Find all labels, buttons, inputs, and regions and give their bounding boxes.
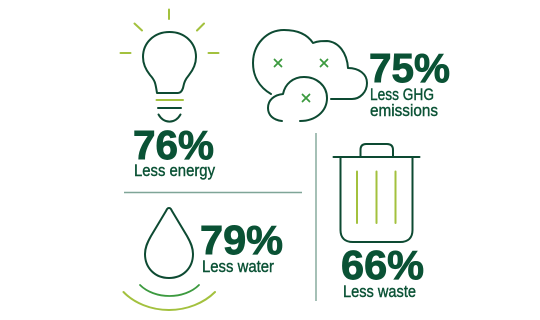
stat: 79%: 79% <box>200 217 283 263</box>
stat: 75%: 75% <box>369 45 450 91</box>
label: less GHG emissions: Less GHG <box>370 86 434 104</box>
panel: GHG emissions <box>253 30 450 121</box>
icon: clouds <box>253 30 367 121</box>
label: less GHG emissions: emissions <box>370 102 438 120</box>
label: less water: Less water <box>202 258 274 276</box>
icon: water drop <box>124 208 215 310</box>
stat: 66%: 66% <box>341 242 424 288</box>
icon: trash can <box>334 144 420 242</box>
icon: light bulb <box>120 10 218 122</box>
label: less energy: Less energy <box>134 162 216 180</box>
label: less waste: Less waste <box>343 283 416 301</box>
panel: waste <box>334 144 424 301</box>
stat: 76%: 76% <box>133 122 214 168</box>
panel: energy <box>120 10 218 180</box>
panel: water <box>124 208 283 310</box>
label: less GHG emissions <box>370 86 438 120</box>
